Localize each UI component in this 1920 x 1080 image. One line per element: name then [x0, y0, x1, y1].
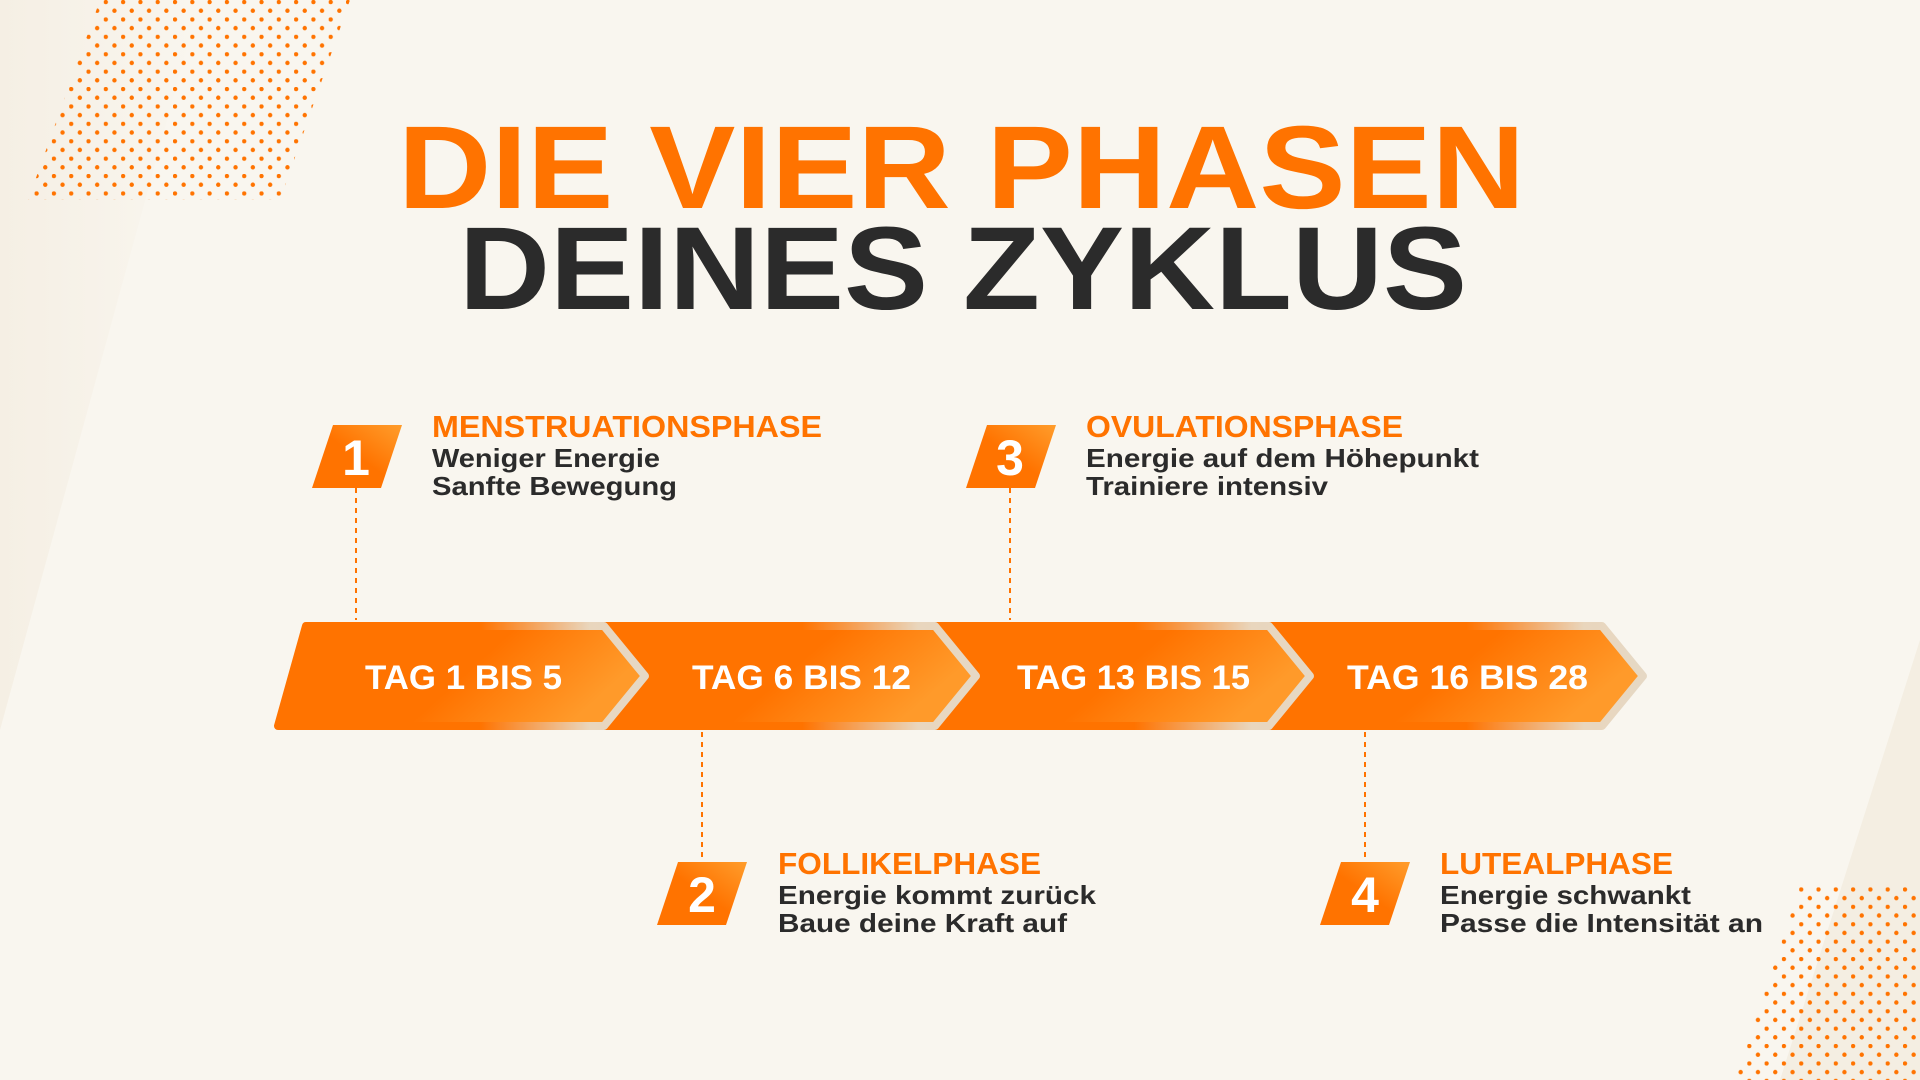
- phase 2: [657, 732, 1097, 938]
- text 3: [1086, 409, 1479, 501]
- text 4: [1440, 846, 1763, 938]
- text 4: LUTEALPHASE: [1440, 846, 1673, 881]
- decoration: dot pattern top left: [28, 0, 350, 200]
- badge 1: 1: [342, 430, 370, 486]
- segment 2: TAG 6 BIS 12: [692, 659, 911, 697]
- text 2: Baue deine Kraft auf: [778, 908, 1067, 938]
- text 2: FOLLIKELPHASE: [778, 846, 1041, 881]
- badge 3: [966, 425, 1056, 488]
- text 3: OVULATIONSPHASE: [1086, 409, 1403, 444]
- title: DEINES ZYKLUS: [459, 203, 1467, 335]
- badge 2: 2: [688, 867, 716, 923]
- timeline arrow band: [278, 626, 1643, 726]
- text 3: Trainiere intensiv: [1086, 471, 1329, 501]
- segment 3: [920, 626, 1310, 726]
- segment 1: [278, 626, 645, 726]
- title: [398, 102, 1525, 335]
- phase 3: [966, 409, 1479, 620]
- badge 4: 4: [1351, 867, 1379, 923]
- text 1: Weniger Energie: [432, 443, 660, 473]
- decoration: dot pattern bottom right: [1735, 886, 1920, 1080]
- title: DIE VIER PHASEN: [398, 102, 1525, 234]
- text 1: MENSTRUATIONSPHASE: [432, 409, 822, 444]
- badge 1: [312, 425, 402, 488]
- text 3: Energie auf dem Höhepunkt: [1086, 443, 1479, 473]
- badge 4: [1320, 862, 1410, 925]
- segment 4: [1250, 626, 1643, 726]
- text 2: Energie kommt zurück: [778, 880, 1097, 910]
- segment 3: TAG 13 BIS 15: [1017, 659, 1250, 697]
- text 4: Energie schwankt: [1440, 880, 1691, 910]
- segment 1: TAG 1 BIS 5: [365, 659, 562, 697]
- text 1: Sanfte Bewegung: [432, 471, 677, 501]
- phase 1: [312, 409, 822, 620]
- text 2: [778, 846, 1097, 938]
- phase 4: [1320, 732, 1763, 938]
- badge 3: 3: [996, 430, 1024, 486]
- segment 4: TAG 16 BIS 28: [1347, 659, 1588, 697]
- segment 2: [590, 626, 976, 726]
- badge 2: [657, 862, 747, 925]
- text 1: [432, 409, 822, 501]
- text 4: Passe die Intensität an: [1440, 908, 1763, 938]
